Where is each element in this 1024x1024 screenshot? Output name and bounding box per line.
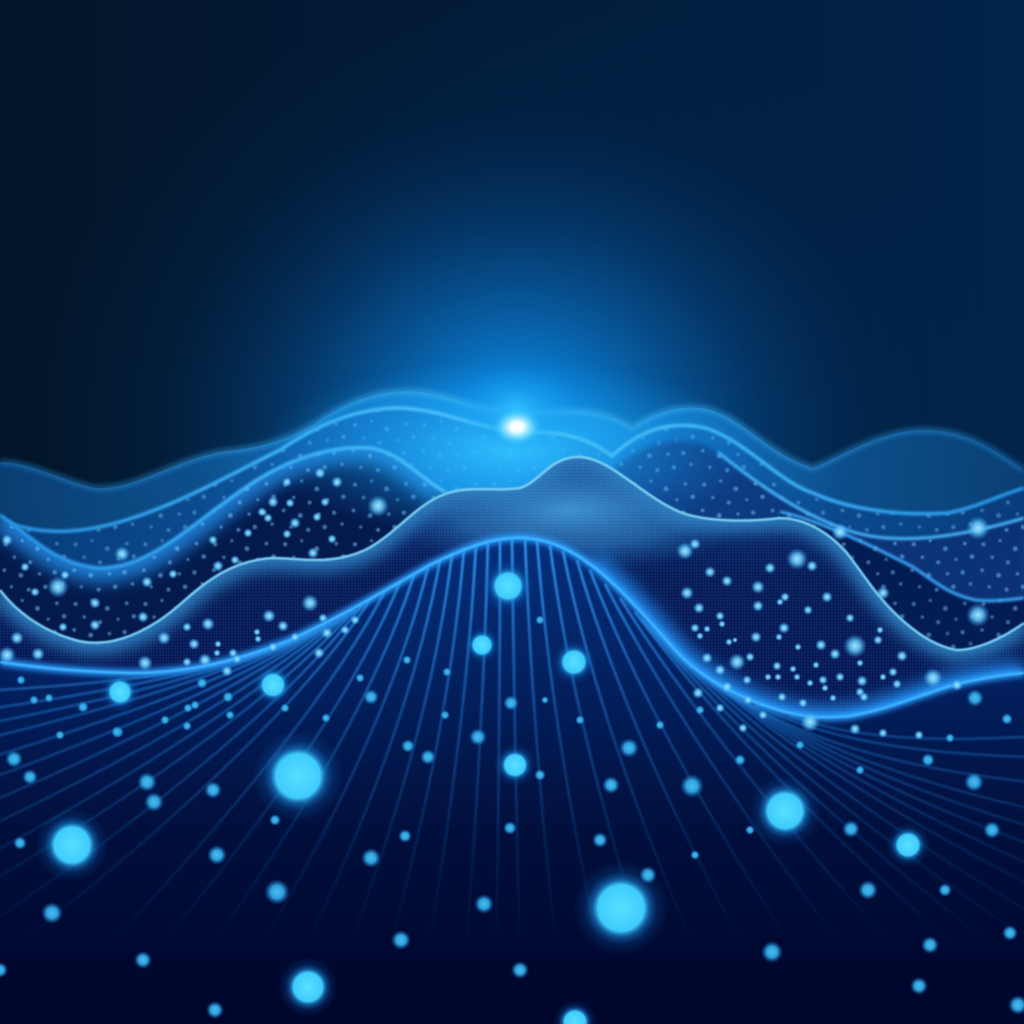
far wave layer [0, 391, 1024, 640]
background glow behind the horizon [0, 0, 1024, 700]
second wave layer [0, 408, 1024, 680]
particles on the front wave [0, 538, 963, 740]
glowing ridge edge of the floor [0, 538, 1024, 717]
glowing particles on the floor: small [0, 615, 1024, 1019]
third wave, right side [612, 441, 1024, 700]
fan lines [0, 537, 1024, 1024]
third wave, left side [0, 444, 446, 664]
crest glow around the light source [260, 360, 760, 540]
glowing particles on the floor: large [35, 560, 930, 1024]
front wave [0, 448, 1024, 717]
bright particles on the rear waves [1, 467, 990, 632]
floor of fanned light lines [0, 537, 1024, 1024]
light flare on the crest [455, 366, 579, 450]
